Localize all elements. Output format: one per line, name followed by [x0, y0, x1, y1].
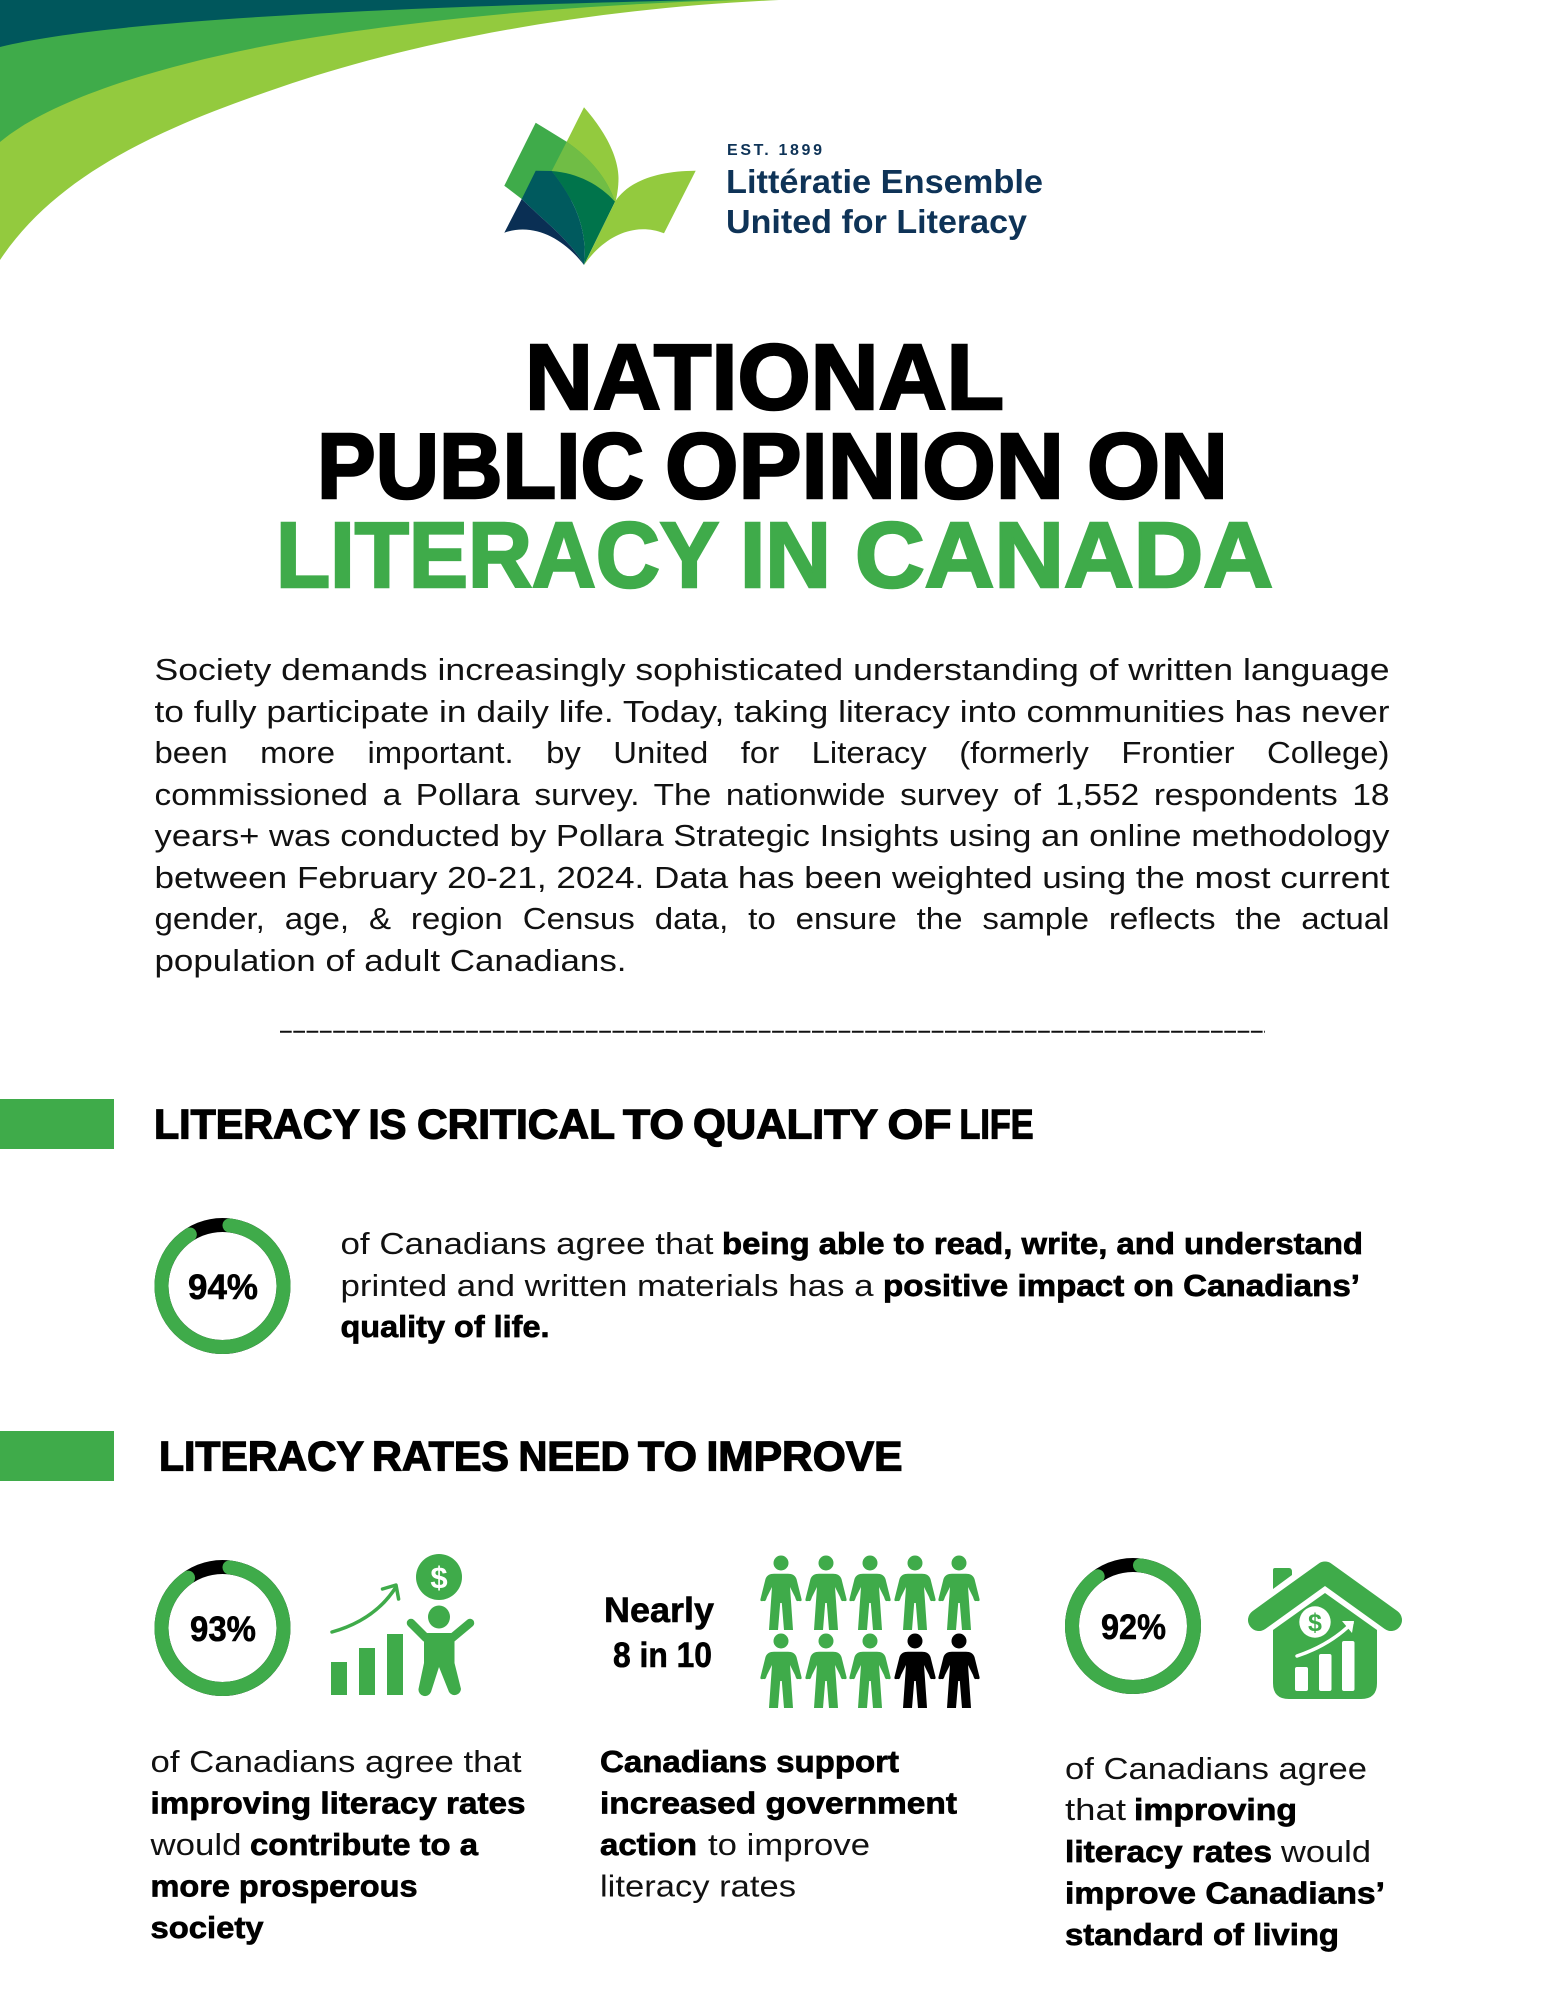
- stat: nearly 8 in 10: [604, 1591, 715, 1675]
- text: 93% statement: society: [150, 1910, 264, 1945]
- heading: literacy rates need to improve: [159, 1432, 902, 1480]
- text: 92% statement: that: [1065, 1792, 1126, 1827]
- icon: prosperity figure with bars and coin: $: [430, 1560, 448, 1595]
- text: 94% statement: positive impact on Canadians’: [883, 1268, 1360, 1303]
- intro paragraph: gender, age, & region Census data, to ensure the sample reflects the actual: [154, 901, 1390, 936]
- text: 93% statement: contribute to a: [250, 1827, 479, 1862]
- text: 94% statement: being able to read, write, and understand: [722, 1226, 1363, 1261]
- text: 93% statement: improving literacy rates: [150, 1786, 526, 1820]
- intro paragraph: between February 20-21, 2024. Data has been weighted using the most current: [154, 860, 1390, 895]
- heading: literacy rates need to improve: IMPROVE: [706, 1432, 902, 1480]
- heading: literacy is critical: OF: [888, 1100, 952, 1148]
- intro paragraph: commissioned a Pollara survey. The nationwide survey of 1,552 respondents 18: [154, 777, 1390, 812]
- intro paragraph: Society demands increasingly sophisticated understanding of written language: [154, 652, 1390, 687]
- icon: house with growth chart: [1259, 1568, 1391, 1699]
- text: government action statement: increased government: [600, 1786, 957, 1820]
- heading: literacy is critical: [154, 1100, 1034, 1148]
- text: 94% statement: [340, 1226, 1363, 1344]
- title: IN: [740, 503, 831, 607]
- text: 93% statement: of Canadians agree that: [150, 1744, 522, 1779]
- intro paragraph: been more important. by United for Literacy (formerly Frontier College): [154, 735, 1390, 770]
- section 1 marker bar: [0, 1099, 114, 1149]
- title: CANADA: [855, 503, 1273, 607]
- heading: literacy is critical: LITERACY: [154, 1100, 360, 1148]
- intro paragraph: to fully participate in daily life. Today, taking literacy into communities has never: [154, 694, 1390, 729]
- logo wordmark: United for Literacy: [726, 203, 1028, 240]
- heading: literacy is critical: QUALITY: [693, 1100, 878, 1148]
- heading: literacy rates need to improve: NEED: [518, 1432, 630, 1480]
- text: 92% statement: improve Canadians’: [1065, 1876, 1385, 1910]
- title: NATIONAL: [525, 325, 1004, 429]
- icon: prosperity figure with bars and coin: [331, 1554, 470, 1696]
- heading: literacy is critical: CRITICAL: [417, 1100, 615, 1148]
- icon: house with growth chart: $: [1308, 1609, 1322, 1637]
- stat: nearly 8 in 10: Nearly: [604, 1591, 715, 1630]
- logo wordmark: [726, 142, 1043, 240]
- text: 94% statement: printed and written materials has a: [340, 1268, 874, 1303]
- title: LITERACY: [276, 503, 719, 607]
- text: government action statement: literacy rates: [600, 1868, 796, 1904]
- section 2 marker bar: [0, 1431, 114, 1481]
- text: 92% statement: improving: [1134, 1792, 1297, 1827]
- donut: 94%: 94%: [188, 1268, 258, 1307]
- heading: literacy is critical: LIFE: [960, 1100, 1034, 1148]
- text: government action statement: [600, 1744, 957, 1904]
- text: 92% statement: standard of living: [1065, 1917, 1339, 1952]
- donut: 92%: [1065, 1558, 1201, 1694]
- intro paragraph: years+ was conducted by Pollara Strategic Insights using an online methodology: [154, 818, 1390, 853]
- text: 94% statement: of Canadians agree that: [340, 1226, 714, 1261]
- icon: open book leaves: [504, 107, 696, 265]
- heading: literacy rates need to improve: RATES: [372, 1432, 509, 1480]
- text: 94% statement: quality of life.: [340, 1309, 550, 1344]
- text: government action statement: Canadians support: [600, 1744, 899, 1779]
- logo wordmark: EST. 1899: [727, 142, 822, 159]
- donut: 92%: 92%: [1101, 1608, 1166, 1647]
- text: 93% statement: would: [149, 1827, 242, 1862]
- text: government action statement: action: [600, 1827, 697, 1862]
- title: [276, 325, 1273, 607]
- title: PUBLIC: [317, 414, 644, 518]
- stat: nearly 8 in 10: 8 in 10: [613, 1636, 712, 1675]
- title: OPINION: [665, 414, 1064, 518]
- logo: [504, 107, 1043, 265]
- text: 92% statement: would: [1280, 1834, 1371, 1869]
- intro paragraph: [154, 652, 1390, 978]
- donut: 93%: [155, 1560, 290, 1696]
- text: 92% statement: [1065, 1751, 1385, 1952]
- logo wordmark: Littératie Ensemble: [726, 163, 1043, 200]
- donut: 94%: [155, 1218, 290, 1354]
- title: ON: [1087, 414, 1228, 518]
- text: 92% statement: of Canadians agree: [1065, 1751, 1367, 1786]
- text: 93% statement: [149, 1744, 526, 1945]
- donut: 93%: 93%: [190, 1610, 256, 1649]
- intro paragraph: population of adult Canadians.: [154, 943, 626, 978]
- heading: literacy rates need to improve: TO: [638, 1432, 697, 1480]
- heading: literacy rates need to improve: LITERACY: [159, 1432, 364, 1480]
- text: 92% statement: literacy rates: [1065, 1834, 1272, 1869]
- text: 93% statement: more prosperous: [150, 1868, 418, 1904]
- text: government action statement: to improve: [708, 1827, 870, 1862]
- corner swoosh decoration: [0, 0, 779, 260]
- heading: literacy is critical: TO: [623, 1100, 684, 1148]
- heading: literacy is critical: IS: [368, 1100, 406, 1148]
- pictogram: 8 of 10 people: [760, 1556, 980, 1708]
